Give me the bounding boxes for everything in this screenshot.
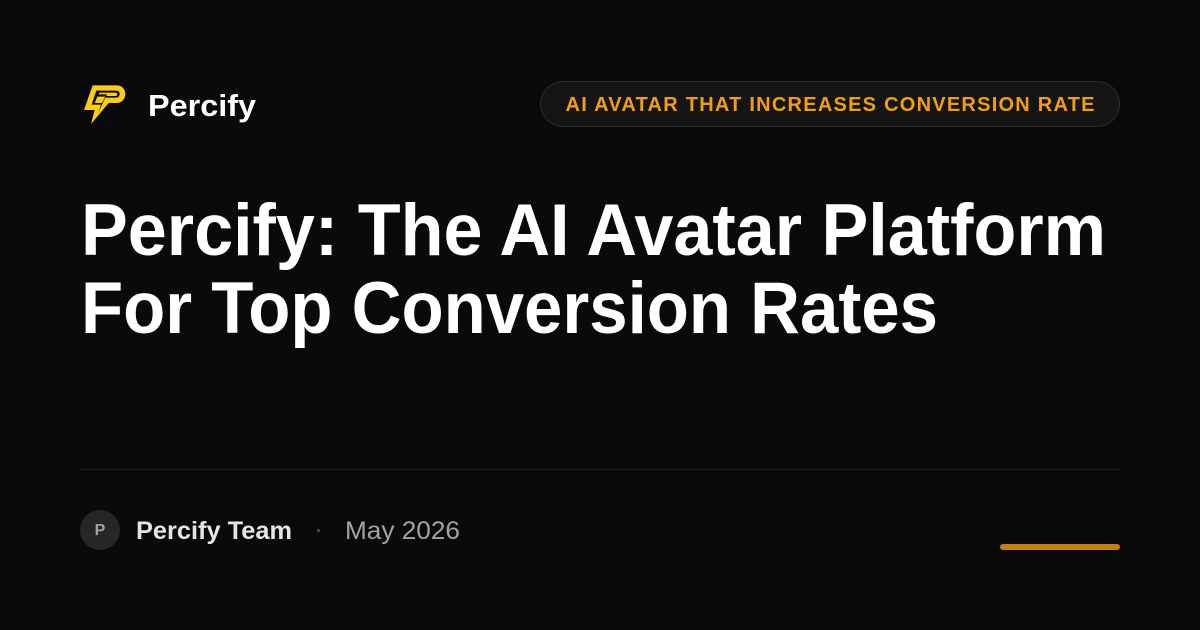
divider [80, 469, 1120, 470]
separator dot [317, 529, 320, 532]
title: For Top Conversion Rates [81, 268, 938, 349]
tagline pill [540, 81, 1120, 127]
author avatar: P [95, 522, 105, 539]
tagline pill: AI AVATAR THAT INCREASES CONVERSION RATE [566, 94, 1094, 116]
author avatar [80, 510, 120, 550]
date: May 2026 [345, 517, 460, 545]
author name: Percify Team [136, 517, 292, 545]
title: Percify: The AI Avatar Platform [81, 190, 1106, 271]
title [81, 190, 1106, 349]
brand name: Percify [148, 88, 257, 123]
accent bar [1000, 544, 1120, 550]
icon: Percify lightning logo [84, 85, 126, 124]
